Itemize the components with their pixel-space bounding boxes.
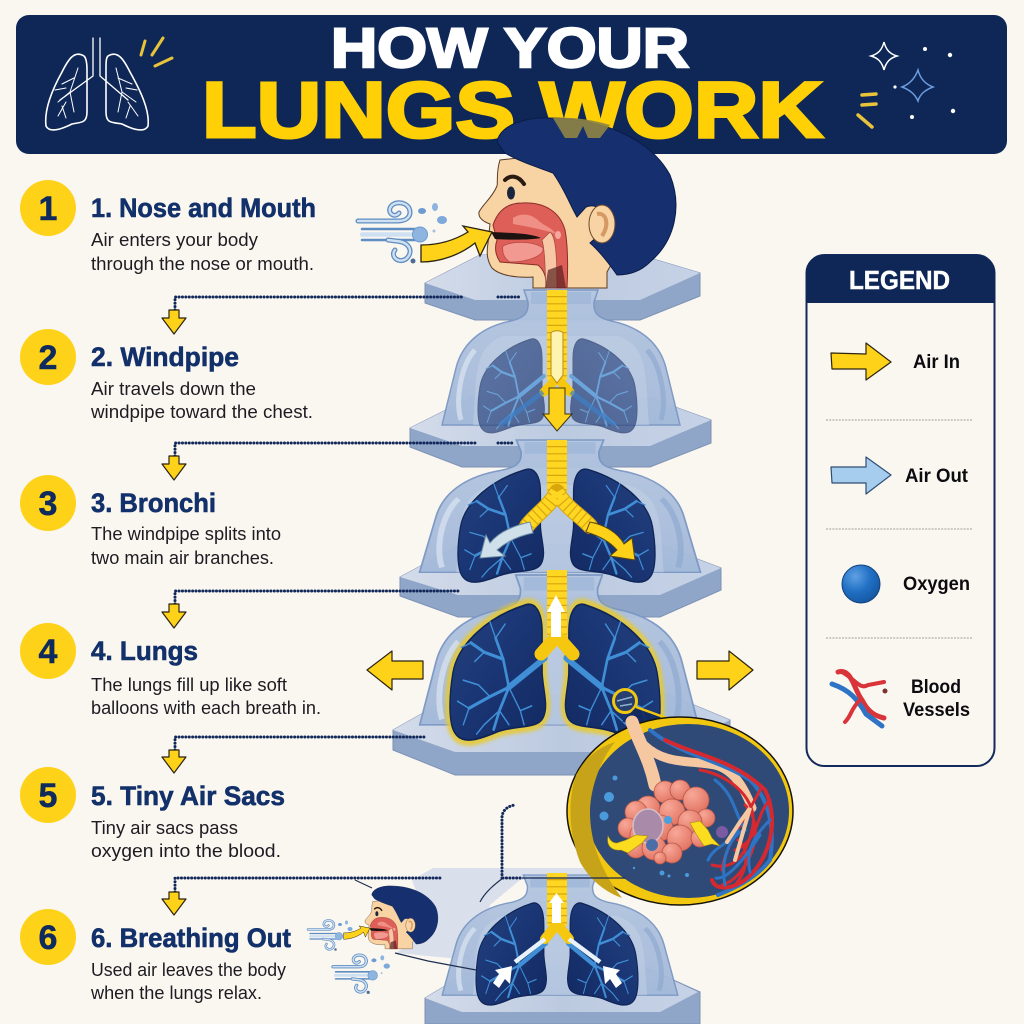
legend: air in: Air In	[913, 352, 960, 373]
flow arrows in the lungs	[480, 331, 635, 988]
title line 2: LUNGS WORK	[202, 65, 823, 154]
step 3: 3	[39, 485, 57, 523]
step 2: 2	[39, 339, 57, 377]
dotted connector lines	[175, 297, 625, 892]
legend: air in	[831, 343, 960, 380]
step 5: Tiny air sacs pass	[91, 818, 238, 838]
panel: legend	[806, 255, 995, 766]
legend: oxygen: Oxygen	[903, 574, 970, 595]
yellow exchange arrows	[608, 821, 720, 853]
magnifier pointer	[614, 690, 672, 722]
step 5: 5. Tiny Air Sacs	[91, 781, 285, 811]
step 3: The windpipe splits into	[91, 524, 281, 544]
legend: air out	[831, 457, 969, 494]
icon: lungs outline	[46, 38, 148, 130]
step 6: Used air leaves the body	[91, 960, 286, 980]
legend: oxygen	[842, 565, 970, 603]
step 4: balloons with each breath in.	[91, 698, 321, 718]
step 3: 3. Bronchi	[91, 488, 216, 518]
windpipes	[500, 290, 615, 962]
step 2: 2. Windpipe	[91, 342, 239, 372]
small exhaling head	[344, 886, 438, 949]
side expansion arrows	[367, 651, 753, 690]
title letter seen through hair	[553, 118, 610, 138]
step 1: 1. Nose and Mouth	[91, 193, 316, 223]
legend: blood vessels	[832, 672, 970, 726]
legend: blood vessels: Blood	[911, 677, 961, 698]
step 2: Air travels down the	[91, 379, 256, 399]
step 1	[20, 180, 316, 274]
icon: incoming wind	[358, 203, 447, 264]
alveoli cluster	[618, 780, 715, 864]
callout outline for small head	[355, 878, 503, 970]
legend: air out: Air Out	[905, 466, 969, 487]
down arrows between steps	[162, 310, 186, 915]
lungs stage 1	[478, 339, 637, 433]
step 3	[20, 475, 281, 568]
step 6: 6	[39, 919, 57, 957]
legend: blood vessels: Vessels	[903, 700, 970, 721]
title banner	[16, 15, 1007, 154]
lungs stage 4	[476, 903, 638, 1005]
step 2	[20, 329, 313, 422]
step 1: 1	[39, 190, 57, 228]
icon: yellow sparks	[141, 38, 172, 66]
step 4	[20, 623, 321, 718]
head with mouth cutaway	[421, 118, 676, 288]
step 2: windpipe toward the chest.	[90, 402, 313, 422]
step 3: two main air branches.	[91, 548, 274, 568]
magnifier: air sacs detail	[567, 717, 793, 905]
platforms	[393, 255, 730, 1024]
peach air tubes	[632, 722, 752, 808]
torso models	[420, 290, 700, 995]
step 6	[20, 909, 291, 1003]
icon: small wind upper	[308, 920, 352, 951]
icon: small wind lower	[333, 955, 390, 994]
panel: legend: LEGEND	[849, 265, 950, 295]
oxygen bubbles	[600, 776, 689, 878]
opened alveolus	[633, 809, 672, 851]
lungs stage 2	[458, 469, 655, 582]
title line 1: HOW YOUR	[331, 16, 689, 79]
step 5	[20, 767, 285, 861]
step 5: oxygen into the blood.	[91, 841, 281, 861]
blood vessels	[650, 730, 772, 895]
step 1: Air enters your body	[91, 230, 258, 250]
step 4: 4	[39, 633, 58, 671]
step 5: 5	[39, 777, 57, 815]
step 4: 4. Lungs	[91, 636, 198, 666]
step 6: 6. Breathing Out	[91, 923, 291, 953]
lungs stage 3 with glow	[450, 604, 660, 740]
step 6: when the lungs relax.	[90, 983, 262, 1003]
icon: stars	[858, 42, 955, 127]
step 1: through the nose or mouth.	[91, 254, 314, 274]
step 4: The lungs fill up like soft	[91, 675, 287, 695]
